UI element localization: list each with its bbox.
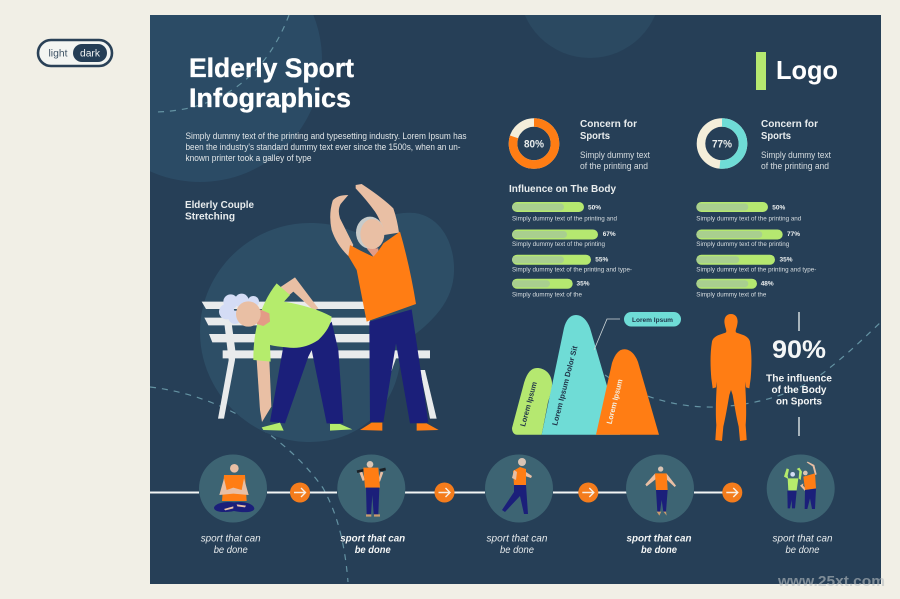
heading: elderly couple stretching: Elderly Couple	[185, 199, 254, 211]
bench	[202, 302, 437, 419]
text: concern left: Sports	[580, 130, 610, 142]
bar chart: left column: 55%	[595, 256, 609, 264]
bar chart: right column: Simply dummy text of the printing and type-	[696, 267, 816, 273]
arrow 4	[722, 482, 742, 502]
bar chart: right column: 48%	[761, 280, 774, 288]
toggle: light dark: light	[48, 48, 68, 60]
text: concern left: Simply dummy text	[580, 150, 650, 160]
bar chart: left column: Simply dummy text of the printing	[512, 242, 605, 248]
illustration: elderly couple and bench	[202, 184, 439, 431]
heading: influence on the body: Influence on The Body	[509, 183, 616, 195]
step 5: couple exercise	[767, 454, 835, 522]
connector line	[150, 492, 732, 494]
donut: 77%: 77%	[712, 138, 732, 150]
arrow 3	[578, 482, 598, 502]
bar chart: left column: Simply dummy text of the printing and type-	[512, 267, 632, 273]
title	[189, 53, 354, 113]
text: concern right	[761, 118, 831, 171]
heading: elderly couple stretching: Stretching	[185, 210, 235, 222]
peak: green: Lorem Ipsum	[518, 381, 539, 428]
peak: teal	[542, 315, 620, 435]
toggle: light dark	[38, 40, 112, 66]
panel: main background	[150, 15, 881, 584]
bar chart: right column: 50%	[772, 204, 786, 212]
bar chart: right column: 35%	[780, 256, 793, 264]
logo: Logo	[776, 55, 838, 85]
decorative background shapes	[150, 15, 880, 582]
peak: orange	[596, 349, 659, 435]
text: concern right: Sports	[761, 130, 791, 142]
bar chart: left column: 67%	[603, 231, 616, 238]
captions	[201, 532, 833, 556]
callout: lorem ipsum	[594, 312, 681, 350]
intro text block	[186, 131, 467, 163]
bar chart: right column: Simply dummy text of the printing and	[696, 216, 801, 222]
intro text block: been the industry's standard dummy text ever since the 1500s, when an un-	[186, 142, 460, 152]
intro text block: known printer took a galley of type	[186, 153, 312, 163]
step 1: meditation	[199, 454, 267, 522]
step 4: skipping	[626, 454, 694, 522]
captions: sport that can	[340, 532, 405, 544]
bar chart: right column: 77%	[787, 231, 800, 238]
callout: lorem ipsum: Lorem Ipsum	[632, 317, 673, 324]
captions: be done	[355, 544, 391, 556]
text: concern right: Concern for	[761, 118, 818, 130]
peak: teal: Lorem Ipsum Dolor Sit	[550, 344, 580, 427]
icon: human body silhouette	[711, 314, 751, 441]
peak: orange: Lorem Ipsum	[605, 378, 625, 425]
title: Elderly Sport	[189, 53, 354, 83]
captions: be done	[500, 544, 534, 556]
step 3: walking	[485, 454, 553, 522]
captions: sport that can	[772, 532, 833, 544]
captions: be done	[641, 544, 677, 556]
timeline	[150, 454, 835, 522]
captions: be done	[786, 544, 820, 556]
heading: elderly couple stretching	[185, 199, 254, 222]
bar chart: right column: Simply dummy text of the printing	[696, 242, 789, 248]
intro text block: Simply dummy text of the printing and typesetting industry. Lorem Ipsum has	[186, 131, 467, 141]
mountain chart	[512, 315, 659, 435]
stat: 90 percent: on Sports	[776, 396, 822, 408]
bar chart: left column: 50%	[588, 204, 601, 212]
captions: sport that can	[486, 532, 548, 544]
donut: 77%	[701, 122, 743, 164]
bar chart: right column: Simply dummy text of the	[696, 293, 767, 299]
arrow 1	[290, 482, 310, 502]
arrow 2	[434, 482, 454, 502]
donut: 80%	[513, 122, 555, 164]
man stretching	[330, 184, 439, 431]
stat: 90 percent: 90%	[772, 336, 826, 364]
stat: 90 percent	[766, 312, 832, 436]
text: concern left	[580, 118, 650, 171]
woman bending	[219, 277, 352, 431]
text: concern right: Simply dummy text	[761, 150, 831, 160]
captions: sport that can	[626, 532, 692, 544]
peak: green	[512, 368, 552, 435]
bar chart: right column	[696, 202, 816, 299]
toggle: light dark: dark	[80, 48, 101, 60]
donut: 80%: 80%	[524, 138, 544, 150]
text: concern left: of the printing and	[580, 161, 648, 171]
stat: 90 percent: of the Body	[772, 385, 827, 396]
text: concern left: Concern for	[580, 118, 637, 130]
bar chart: left column: Simply dummy text of the printing and	[512, 216, 617, 222]
text: concern right: of the printing and	[761, 161, 829, 171]
logo	[756, 52, 838, 90]
watermark: www.25xt.com	[777, 573, 885, 590]
title: Infographics	[189, 83, 351, 113]
captions: sport that can	[201, 532, 261, 544]
bar chart: left column: 35%	[576, 280, 590, 288]
stat: 90 percent: The influence	[766, 374, 832, 384]
captions: be done	[214, 544, 248, 556]
bar chart: left column: Simply dummy text of the	[512, 293, 583, 299]
bar chart: left column	[512, 202, 632, 299]
step 2: dumbbells	[337, 454, 405, 522]
